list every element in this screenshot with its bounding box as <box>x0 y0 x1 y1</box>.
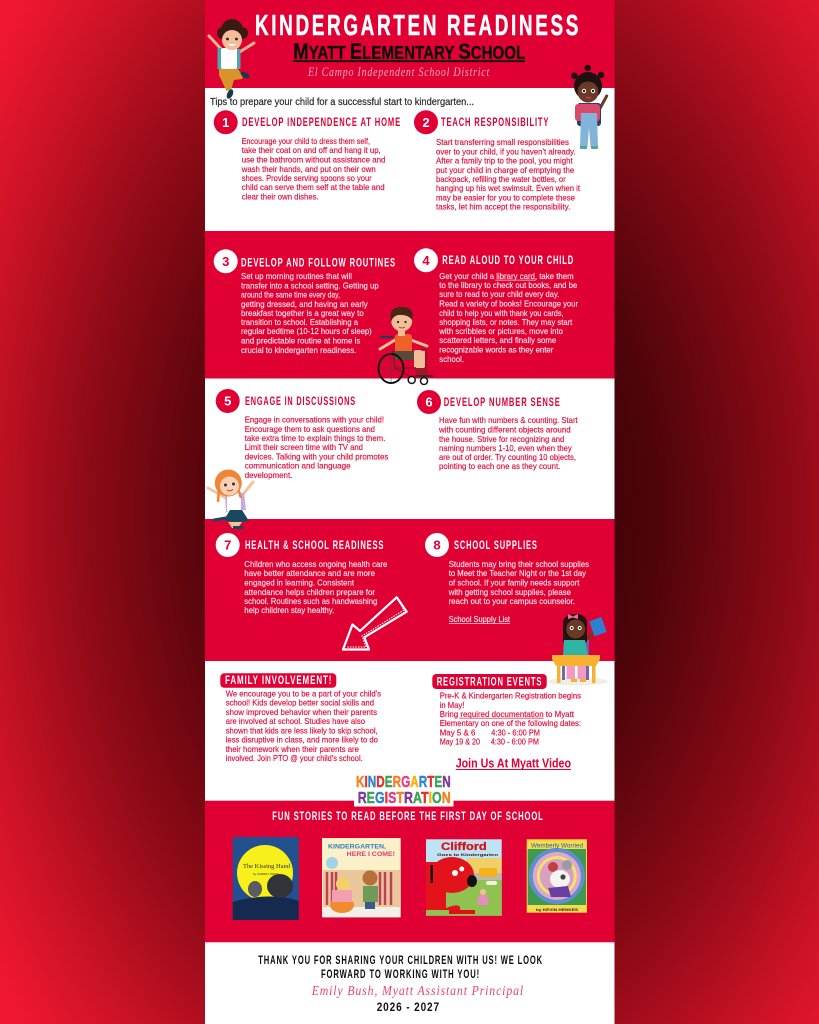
body 5: Encourage them to ask questions and <box>245 424 375 434</box>
book: The Kissing Hand <box>233 837 299 920</box>
body 3: around the same time every day, <box>241 290 340 300</box>
book: The Kissing Hand: by AUDREY PENN <box>253 872 278 876</box>
book: Wemberly Worried <box>527 839 587 913</box>
body 1: use the bathroom without assistance and <box>242 154 386 164</box>
thank you message: FORWARD TO WORKING WITH YOU! <box>321 969 480 981</box>
registration body: Elementary on one of the following dates: <box>440 718 581 728</box>
number 5: 5 <box>224 394 231 409</box>
panel: tip 7 <box>216 533 388 615</box>
family body: We encourage you to be a part of your child's <box>226 688 381 698</box>
panel: tip 1 <box>214 110 401 202</box>
body 6: are out of order. Try counting 10 objects, <box>439 452 576 462</box>
heading 4: READ ALOUD TO YOUR CHILD <box>442 255 574 267</box>
family heading: FAMILY INVOLVEMENT! <box>225 675 332 687</box>
body 8: Students may bring their school supplies <box>449 559 589 569</box>
school name: MYATT ELEMENTARY SCHOOL <box>293 39 525 64</box>
red band: books <box>205 801 614 942</box>
red band: tips 3 and 4 <box>205 231 614 378</box>
kindergarten registration logo: KINDERGARTEN <box>356 774 451 791</box>
book: Kindergarten, Here I Come <box>322 838 401 917</box>
white page panel <box>205 0 614 1024</box>
number 1: 1 <box>222 115 229 130</box>
arrow <box>343 597 407 650</box>
school year: 2026 - 2027 <box>377 1002 440 1014</box>
book: Clifford Goes to Kindergarten: Clifford <box>441 841 487 853</box>
heading 3: DEVELOP AND FOLLOW ROUTINES <box>241 258 396 270</box>
body 1: wash their hands, and put on their own <box>241 164 376 174</box>
body 8: with getting school supplies, please <box>448 587 571 597</box>
body 4: child to help you with thank you cards, <box>439 308 564 318</box>
book: Kindergarten, Here I Come: HERE I COME! <box>347 852 395 858</box>
body 4: Read a variety of books! Encourage your <box>439 298 578 308</box>
body 2: tasks, let him accept the responsibility. <box>436 202 570 212</box>
number 8: 8 <box>433 538 441 553</box>
registration body: in May! <box>440 700 464 710</box>
body 3: and predictable routine at home is <box>241 336 360 346</box>
kindergarten registration logo: REGISTRATION <box>358 790 451 807</box>
body 4: school. <box>439 354 464 364</box>
body 4: scattered letters, and finally some <box>439 335 557 345</box>
red band: tips 7 and 8 <box>205 519 614 661</box>
book: Wemberly Worried: Wemberly Worried <box>531 842 584 850</box>
kindergarten registration logo <box>354 773 454 807</box>
body 7: help children stay healthy. <box>244 605 334 615</box>
body 8 <box>448 559 589 606</box>
body 8: reach out to your campus counselor. <box>449 596 575 606</box>
panel: registration events <box>432 674 581 770</box>
body 1: child can serve them self at the table and <box>242 182 385 192</box>
icon: jumping boy <box>209 19 254 100</box>
panel: tip 4 <box>414 248 578 364</box>
body 4: Get your child a library card, take them <box>439 271 574 281</box>
registration body: 4:30 - 6:00 PM <box>491 728 540 738</box>
body 1: Encourage your child to dress them self, <box>242 136 370 146</box>
family body <box>226 688 381 763</box>
body 1: clear their own dishes. <box>242 192 319 202</box>
books heading: FUN STORIES TO READ BEFORE THE FIRST DAY OF SCHOOL <box>272 811 544 823</box>
body 8: of school. If your family needs support <box>449 578 580 588</box>
title: KINDERGARTEN READINESS <box>255 10 581 42</box>
body 3: transfer into a school setting. Getting up <box>241 280 379 290</box>
panel: tip 8 <box>425 533 589 624</box>
body 6: pointing to each one as they count. <box>439 461 560 471</box>
body 4: to the library to check out books, and be <box>439 280 578 290</box>
heading 1: DEVELOP INDEPENDENCE AT HOME <box>242 117 401 129</box>
body 7 <box>244 559 388 615</box>
school supply link: School Supply List <box>449 614 511 624</box>
body 2 <box>436 137 581 212</box>
book: Kindergarten, Here I Come: KINDERGARTEN, <box>328 844 386 850</box>
body 3: crucial to kindergarten readiness. <box>241 345 356 355</box>
registration body: Bring required documentation to Myatt <box>440 709 575 719</box>
registration body: 4:30 - 6:00 PM <box>491 736 539 746</box>
family body: school! Kids develop better social skills and <box>226 698 374 708</box>
body 5: Engage in conversations with your child! <box>245 414 384 424</box>
heading 7: HEALTH & SCHOOL READINESS <box>245 540 384 552</box>
body 5: Limit their screen time with TV and <box>245 442 363 452</box>
body 3 <box>241 271 379 355</box>
registration heading: REGISTRATION EVENTS <box>437 676 542 688</box>
body 7: have better attendance and are more <box>244 568 375 578</box>
body 7: engaged in learning. Consistent <box>244 578 355 588</box>
thank you message: THANK YOU FOR SHARING YOUR CHILDREN WITH US! WE LOOK <box>258 955 543 967</box>
body 6: Have fun with numbers & counting. Start <box>439 415 578 425</box>
body 5: devices. Talking with your child promotes <box>245 452 388 462</box>
body 3: breakfast together is a great way to <box>241 308 364 318</box>
body 5: communication and language <box>245 460 351 470</box>
body 2: backpack, refilling the water bottles, or <box>436 174 566 184</box>
family body: involved. Join PTO @ your child's school. <box>226 753 363 763</box>
body 6: naming numbers 1-10, even when they <box>439 443 572 453</box>
body 5: development. <box>245 470 292 480</box>
family body: shown that kids are less likely to skip school, <box>226 726 378 736</box>
registration body: May 19 & 20 <box>440 736 480 746</box>
body 5 <box>245 414 388 480</box>
body 4: recognizable words as they enter <box>439 344 554 354</box>
heading 6: DEVELOP NUMBER SENSE <box>444 397 561 409</box>
family body: their homework when their parents are <box>226 744 359 754</box>
heading 2: TEACH RESPONSIBILITY <box>441 117 549 129</box>
icon: jumping girl with orange hair <box>208 470 253 529</box>
body 5: take extra time to explain things to them. <box>245 433 385 443</box>
body 4: shopping lists, or notes. They may start <box>439 317 573 327</box>
book: The Kissing Hand: The Kissing Hand <box>243 863 291 870</box>
number 6: 6 <box>425 395 433 410</box>
video link: Join Us At Myatt Video <box>456 756 571 770</box>
book: Clifford Goes to Kindergarten: Goes to Kindergarten <box>437 853 499 857</box>
body 7: school. Routines such as handwashing <box>244 596 378 606</box>
body 3: Set up morning routines that will <box>241 271 352 281</box>
body 1: shoes. Provide serving spoons so your <box>242 173 372 183</box>
family body: are involved at school. Studies have also <box>226 716 365 726</box>
body 7: attendance helps children prepare for <box>244 587 375 597</box>
body 1 <box>241 136 386 202</box>
signature: Emily Bush, Myatt Assistant Principal <box>311 984 524 999</box>
body 2: put your child in charge of emptying the <box>436 165 575 175</box>
family body: show improved behavior when their parents <box>226 707 377 717</box>
district name: El Campo Independent School District <box>307 64 490 79</box>
book: Wemberly Worried: by KEVIN HENKES <box>536 907 578 912</box>
body 3: transition to school. Establishing a <box>241 317 358 327</box>
thank you message <box>258 955 543 981</box>
number 7: 7 <box>224 538 231 553</box>
panel: tip 3 <box>214 249 396 355</box>
header band <box>205 0 614 88</box>
icon: girl with overalls <box>571 65 607 149</box>
body 2: over to your child, if you haven't already. <box>436 146 576 156</box>
panel: tip 5 <box>216 389 388 480</box>
panel: tip 6 <box>417 390 578 471</box>
body 6: with counting different objects around <box>438 424 571 434</box>
body 3: getting dressed, and having an early <box>241 299 369 309</box>
number 3: 3 <box>222 254 229 269</box>
body 2: hanging up his wet swimsuit. Even when it <box>436 183 581 193</box>
icon: boy in wheelchair <box>378 307 433 384</box>
number 4: 4 <box>422 253 430 268</box>
tips intro line: Tips to prepare your child for a successful start to kindergarten... <box>210 97 474 108</box>
body 4: sure to read to your child every day. <box>439 289 559 299</box>
body 6: the house. Strive for recognizing and <box>439 434 565 444</box>
body 2: may be easier for you to complete these <box>436 192 575 202</box>
number 2: 2 <box>422 115 430 130</box>
body 7: Children who access ongoing health care <box>244 559 388 569</box>
body 8: to Meet the Teacher Night or the 1st day <box>449 568 587 578</box>
registration body <box>440 690 581 746</box>
body 2: Start transferring small responsibilities <box>436 137 569 147</box>
body 3: regular bedtime (10-12 hours of sleep) <box>241 326 372 336</box>
family body: less disruptive in class, and more likely to do <box>226 734 378 744</box>
body 4 <box>438 271 578 364</box>
icon: girl at desk with book <box>548 614 608 686</box>
body 1: take their coat on and off and hang it up, <box>242 145 381 155</box>
book: Clifford Goes to Kindergarten <box>426 839 502 916</box>
registration body: May 5 & 6 <box>440 728 476 738</box>
registration body: Pre-K & Kindergarten Registration begins <box>440 690 581 700</box>
panel: tip 2 <box>414 110 581 212</box>
heading 8: SCHOOL SUPPLIES <box>454 540 538 552</box>
panel: family involvement <box>220 673 381 763</box>
body 6 <box>438 415 578 471</box>
body 4: with scribbles or pictures, move into <box>438 326 563 336</box>
heading 5: ENGAGE IN DISCUSSIONS <box>245 396 356 408</box>
body 2: After a family trip to the pool, you might <box>436 156 573 166</box>
